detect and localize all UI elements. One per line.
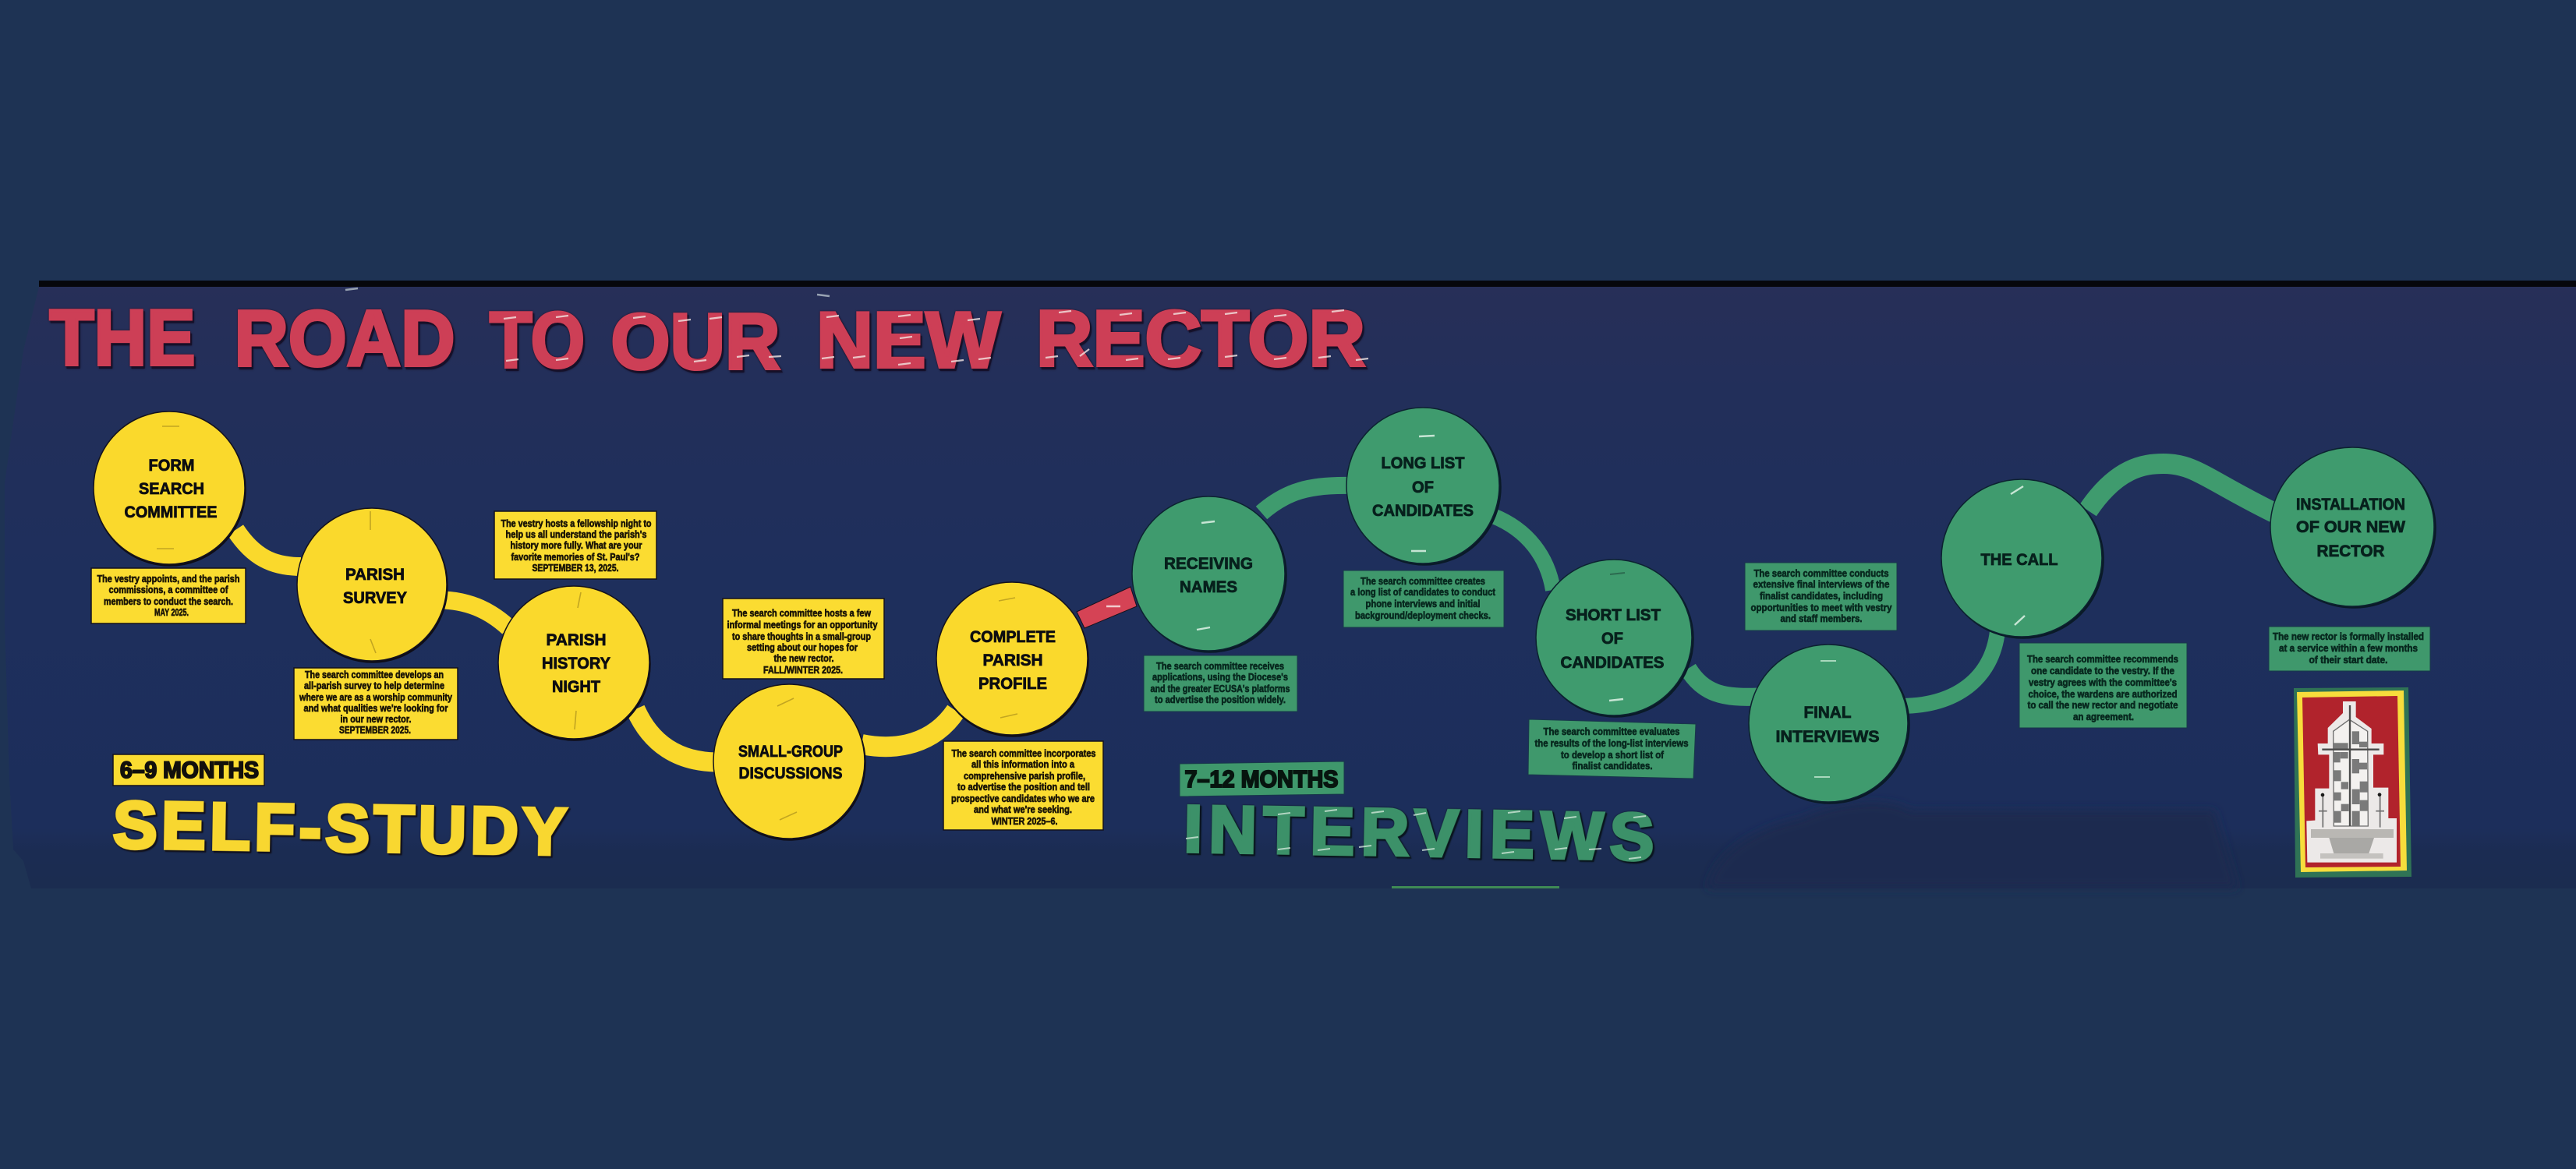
node: small-group discussions [713,684,865,839]
note: complete parish profile: WINTER 2025–6. [992,816,1057,827]
note: parish survey [294,668,458,740]
note: final interviews: and staff members. [1781,613,1862,624]
note: parish history night: The vestry hosts a fellowship night to [501,518,652,529]
red connector: self-study to interviews [1077,587,1137,628]
note: short list of candidates: the results of the long-list interviews [1534,738,1689,749]
node: final interviews: INTERVIEWS [1776,728,1879,746]
node: form search committee: COMMITTEE [125,503,217,521]
node: long list of candidates: OF [1412,479,1434,496]
node: installation of our new rector: INSTALLATION [2296,496,2405,514]
note: parish history night [494,511,656,579]
note: parish survey: where we are as a worship community [299,692,452,703]
node: final interviews [1749,645,1908,802]
node: installation of our new rector: OF OUR NEW [2296,518,2405,536]
title: TO [490,297,585,384]
note: complete parish profile: to advertise the position and tell [957,782,1090,793]
node: small-group discussions: SMALL-GROUP [738,743,843,761]
note: parish history night: favorite memories of St. Paul's? [511,552,639,563]
node: installation of our new rector: RECTOR [2317,542,2384,560]
note: final interviews [1745,563,1897,630]
note: short list of candidates [1528,719,1696,779]
node: the call [1941,479,2102,637]
note: the call: one candidate to the vestry. If the [2031,666,2174,676]
node: parish survey: SURVEY [343,589,407,607]
connector: small-group to profile [862,711,956,747]
note: parish history night: history more fully. What are your [510,540,642,551]
navy paper panel [5,287,2576,888]
heading: self-study: SELF-STUDY [112,788,568,870]
note: installation [2269,627,2430,671]
note: receiving names: applications, using the Diocese's [1152,672,1288,683]
note: parish survey: SEPTEMBER 2025. [339,725,411,736]
note: the call: vestry agrees with the committee's [2029,677,2177,688]
connector: form to survey [235,530,301,567]
node: long list of candidates: LONG LIST [1382,454,1465,472]
node: long list of candidates: CANDIDATES [1372,502,1474,520]
note: form search committee: members to conduct the search. [104,596,233,607]
title: ROAD [234,295,455,383]
node: parish history night [498,586,649,739]
node: parish history night: HISTORY [542,655,610,673]
node: short list of candidates: OF [1601,630,1623,648]
note: small-group discussions: to share thoughts in a small-group [732,631,871,642]
connector: call to installation [2088,464,2274,513]
note: receiving names: The search committee receives [1156,661,1284,672]
note: long list of candidates: phone interviews and initial [1366,599,1480,609]
icon: church reredos emblem [2294,687,2411,878]
note: parish survey: and what qualities we're looking for [304,703,448,714]
note: final interviews: The search committee conducts [1754,568,1889,579]
note: the call [2019,643,2187,728]
note: receiving names [1144,655,1297,712]
period tag: 7-12 months: 7–12 MONTHS [1185,765,1338,793]
node: parish history night: PARISH [546,631,607,649]
note: form search committee [91,568,246,623]
note: complete parish profile: The search committee incorporates [951,748,1096,759]
note: complete parish profile: prospective candidates who we are [951,793,1095,804]
node: parish history night: NIGHT [552,678,600,696]
note: short list of candidates: to develop a short list of [1561,750,1665,761]
title: NEW [816,297,1001,384]
note: small-group discussions: informal meetings for an opportunity [727,620,878,630]
note: complete parish profile [943,741,1103,830]
note: small-group discussions [723,599,884,679]
note: the call: an agreement. [2073,712,2134,722]
note: small-group discussions: FALL/WINTER 2025. [763,665,843,676]
node: long list of candidates [1346,408,1499,563]
note: parish survey: The search committee develops an [305,669,444,680]
panel: self-study phase [91,411,1103,870]
connector: long list to short list [1493,516,1553,590]
note: complete parish profile: and what we're seeking. [974,804,1072,815]
note: small-group discussions: The search committee hosts a few [732,608,871,619]
dark shaded area lower right [1707,802,2238,888]
note: long list of candidates [1343,570,1504,627]
node: short list of candidates: CANDIDATES [1561,654,1664,672]
note: final interviews: extensive final interviews of the [1753,579,1890,590]
note: long list of candidates: a long list of candidates to conduct [1350,587,1496,598]
note: short list of candidates: finalist candidates. [1572,761,1653,772]
node: parish survey: PARISH [345,566,405,584]
node: complete parish profile [936,582,1088,735]
note: final interviews: finalist candidates, including [1760,591,1883,602]
note: receiving names: and the greater ECUSA's platforms [1151,683,1290,694]
green strip at lower edge [1392,886,1559,888]
note: the call: to call the new rector and negotiate [2027,700,2178,711]
title [50,295,1365,386]
node: parish survey [297,508,447,661]
title: THE [50,295,195,382]
note: complete parish profile: all this information into a [971,759,1075,770]
note: receiving names: to advertise the position widely. [1155,694,1286,705]
node: form search committee: FORM [148,457,195,475]
connector: survey to history [444,600,508,627]
node: installation of our new rector [2270,447,2434,606]
note: short list of candidates: The search committee evaluates [1544,726,1680,737]
connector: history to small-group [635,709,716,762]
node: form search committee [94,411,245,564]
node: small-group discussions: DISCUSSIONS [739,765,842,782]
note: form search committee: MAY 2025. [154,607,189,618]
note: complete parish profile: comprehensive parish profile, [964,771,1085,782]
note: form search committee: commissions, a committee of [109,584,228,595]
note: parish survey: all-parish survey to help determine [304,680,444,691]
node: short list of candidates: SHORT LIST [1566,606,1661,624]
connector: receiving to long list [1261,486,1350,513]
note: parish survey: in our new rector. [340,714,412,725]
title: RECTOR [1036,295,1365,383]
node: receiving names [1132,496,1285,651]
top black rail [39,281,2576,287]
node: the call: THE CALL [1980,551,2058,569]
heading: interviews: INTERVIEWS [1184,793,1654,874]
node: short list of candidates [1536,560,1692,715]
node: final interviews: FINAL [1804,704,1852,722]
note: the call: choice, the wardens are authorized [2029,689,2177,700]
node: receiving names: RECEIVING [1164,555,1253,573]
note: installation: The new rector is formally installed [2273,631,2424,642]
note: form search committee: The vestry appoints, and the parish [97,574,240,584]
node: complete parish profile: COMPLETE [970,628,1056,646]
period tag: 6-9 months: 6–9 MONTHS [120,758,259,783]
note: small-group discussions: setting about our hopes for [747,642,858,653]
panel: interviews phase [1132,408,2434,878]
node: receiving names: NAMES [1180,578,1237,596]
note: installation: at a service within a few months [2279,643,2418,654]
note: parish history night: SEPTEMBER 13, 2025. [532,563,619,574]
connector: final to call [1902,631,1997,706]
node: complete parish profile: PARISH [982,652,1043,669]
node: complete parish profile: PROFILE [978,675,1047,693]
node: form search committee: SEARCH [139,480,204,498]
note: parish history night: help us all understand the parish's [505,529,647,540]
note: final interviews: opportunities to meet with vestry [1751,602,1892,613]
title: OUR [611,298,780,386]
connector: short list to final [1688,669,1758,697]
note: long list of candidates: background/deployment checks. [1355,610,1491,621]
note: installation: of their start date. [2309,655,2387,666]
note: small-group discussions: the new rector. [773,653,834,664]
note: long list of candidates: The search committee creates [1361,576,1485,587]
note: the call: The search committee recommends [2027,654,2178,665]
